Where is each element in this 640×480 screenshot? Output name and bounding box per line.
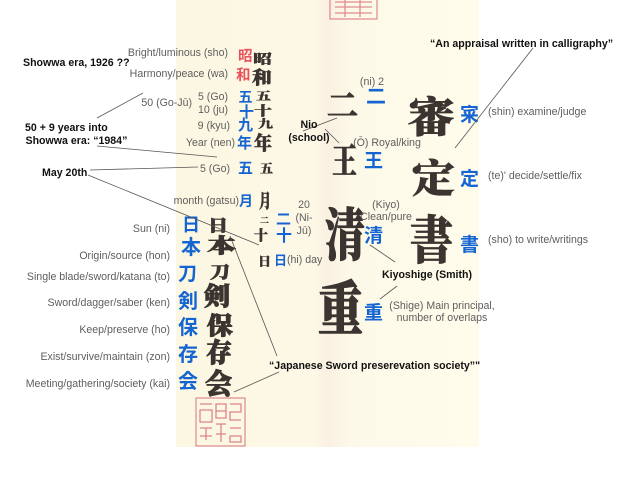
brush calligraphy: appraisal title: 書 bbox=[410, 199, 453, 274]
brush calligraphy: date column bbox=[252, 48, 274, 269]
date meaning labels: 9 (kyu) bbox=[198, 120, 230, 132]
appraisal meaning labels: (shin) examine/judge bbox=[488, 106, 586, 118]
date meaning labels bbox=[128, 47, 239, 207]
brush calligraphy: appraisal title bbox=[408, 84, 455, 274]
brush calligraphy: Nio Kiyoshige signature: 王 bbox=[332, 134, 357, 183]
brush calligraphy: Japanese Sword Preservation Society column bbox=[204, 213, 236, 402]
smith name meaning labels: (ni) 2 bbox=[360, 76, 384, 88]
blue kanji: date transcription bbox=[237, 87, 292, 269]
blue kanji: smith name and appraisal transcription: 清 bbox=[364, 221, 383, 248]
panel: scroll paper bbox=[176, 0, 479, 447]
appraisal meaning labels: (te)' decide/settle/fix bbox=[488, 170, 583, 182]
society meaning labels: Origin/source (hon) bbox=[79, 250, 170, 262]
blue kanji: date transcription: 十 bbox=[276, 222, 292, 246]
smith name meaning labels: (Kiyo) bbox=[372, 199, 400, 211]
heading: Japanese Sword preservation society: “Japanese Sword preserevation society”" bbox=[269, 360, 480, 372]
heading: Showwa era: Showwa era, 1926 ?? bbox=[23, 57, 130, 69]
date meaning labels: month (gatsu) bbox=[174, 195, 239, 207]
appraisal meaning labels: (sho) to write/writings bbox=[488, 234, 588, 246]
brush calligraphy: Japanese Sword Preservation Society column: 日 bbox=[208, 213, 228, 236]
brush calligraphy: Japanese Sword Preservation Society column: 存 bbox=[206, 330, 232, 370]
brush calligraphy: date column: 月 bbox=[259, 186, 271, 214]
red kanji: Showa era bbox=[236, 45, 252, 85]
heading: May 20th: May 20th bbox=[42, 167, 87, 179]
date meaning labels: 5 (Go) bbox=[198, 91, 228, 103]
blue kanji: smith name and appraisal transcription: 王 bbox=[364, 146, 383, 173]
connector lines bbox=[88, 48, 533, 392]
red seal: bottom bbox=[196, 398, 245, 446]
red seal: top bbox=[330, 0, 377, 19]
blue kanji: date transcription: 十 bbox=[239, 101, 254, 122]
red kanji: Showa era: 和 bbox=[236, 64, 250, 85]
brush calligraphy: date column: 五 bbox=[260, 159, 274, 176]
brush calligraphy: date column: 二 bbox=[260, 215, 270, 226]
day meaning labels: 20 bbox=[298, 199, 310, 211]
heading: appraisal: “An appraisal written in calligraphy” bbox=[430, 38, 613, 50]
brush calligraphy: date column: 日 bbox=[258, 252, 271, 269]
smith name meaning labels: Clean/pure bbox=[360, 211, 412, 223]
brush calligraphy: Nio Kiyoshige signature: 清 bbox=[325, 190, 365, 272]
blue kanji: society transcription: 剣 bbox=[178, 285, 198, 314]
blue kanji: society transcription: 本 bbox=[181, 231, 201, 260]
blue kanji: date transcription: 五 bbox=[238, 157, 253, 178]
blue kanji: society transcription: 会 bbox=[178, 365, 198, 394]
society meaning labels: Sword/dagger/saber (ken) bbox=[48, 297, 170, 309]
blue kanji: date transcription: 二 bbox=[276, 208, 291, 229]
blue kanji: smith name and appraisal transcription: 重 bbox=[364, 298, 383, 325]
brush calligraphy: Nio Kiyoshige signature: 二 bbox=[327, 81, 358, 126]
brush calligraphy: date column: 九 bbox=[258, 115, 273, 131]
brush calligraphy: date column: 十 bbox=[254, 101, 272, 120]
brush calligraphy: Japanese Sword Preservation Society column: 保 bbox=[207, 307, 233, 342]
blue kanji: date transcription: 五 bbox=[238, 87, 252, 107]
brush calligraphy: Japanese Sword Preservation Society column: 剣 bbox=[204, 278, 230, 313]
day meaning labels: Jū) bbox=[297, 225, 311, 237]
society meaning labels: Exist/survive/maintain (zon) bbox=[40, 351, 170, 363]
society meaning labels: Keep/preserve (ho) bbox=[79, 324, 170, 336]
smith name meaning labels: (Shige) Main principal, bbox=[389, 300, 495, 312]
blue kanji: date transcription: 年 bbox=[237, 132, 252, 153]
day meaning labels: (hi) day bbox=[287, 254, 323, 266]
blue kanji: smith name and appraisal transcription: 宷 bbox=[460, 100, 479, 127]
appraisal meaning labels bbox=[488, 106, 588, 246]
blue kanji: society transcription: 日 bbox=[182, 211, 200, 237]
blue kanji: society transcription bbox=[178, 211, 201, 394]
smith name meaning labels: number of overlaps bbox=[397, 312, 487, 324]
blue kanji: date transcription: 九 bbox=[238, 114, 253, 135]
brush calligraphy: date column: 和 bbox=[252, 64, 272, 89]
date meaning labels: 5 (Go) bbox=[200, 163, 230, 175]
brush calligraphy: date column: 昭 bbox=[253, 48, 272, 67]
blue kanji: society transcription: 存 bbox=[178, 338, 198, 367]
smith name meaning labels: (Ō) Royal/king bbox=[353, 137, 421, 149]
blue kanji: date transcription: 月 bbox=[239, 191, 253, 211]
date meaning labels: 50 (Go-Jū) bbox=[141, 97, 192, 109]
brush calligraphy: date column: 五 bbox=[256, 87, 271, 103]
heading: Kiyoshige Smith: Kiyoshige (Smith) bbox=[382, 269, 472, 281]
society meaning labels: Sun (ni) bbox=[133, 223, 170, 235]
brush calligraphy: date column: 十 bbox=[254, 225, 268, 245]
blue kanji: smith name and appraisal transcription: 書 bbox=[460, 230, 479, 257]
heading: 50 + 9 years into Showwa era: Showwa era: “1984” bbox=[26, 135, 127, 147]
red kanji: Showa era: 昭 bbox=[238, 45, 252, 66]
brush calligraphy: Nio Kiyoshige signature bbox=[318, 81, 365, 348]
brush calligraphy: Japanese Sword Preservation Society column: 本 bbox=[207, 230, 236, 259]
society meaning labels: Single blade/sword/katana (to) bbox=[27, 271, 170, 283]
heading: Nio school: Nio bbox=[300, 119, 318, 131]
day meaning labels bbox=[287, 199, 323, 266]
date meaning labels: 10 (ju) bbox=[198, 104, 228, 116]
smith name meaning labels bbox=[353, 76, 495, 324]
date meaning labels: Harmony/peace (wa) bbox=[130, 68, 228, 80]
blue kanji: date transcription: 日 bbox=[274, 250, 287, 269]
heading: 50 + 9 years into Showwa era: 50 + 9 years into bbox=[25, 122, 108, 134]
day meaning labels: (Ni- bbox=[295, 212, 313, 224]
blue kanji: society transcription: 保 bbox=[178, 311, 198, 340]
brush calligraphy: appraisal title: 定 bbox=[412, 148, 455, 204]
society meaning labels: Meeting/gathering/society (kai) bbox=[26, 378, 170, 390]
blue kanji: smith name and appraisal transcription: 定 bbox=[460, 164, 479, 191]
date meaning labels: Bright/luminous (sho) bbox=[128, 47, 228, 59]
blue kanji: smith name and appraisal transcription bbox=[364, 80, 479, 325]
blue kanji: smith name and appraisal transcription: 二 bbox=[366, 80, 386, 109]
brush calligraphy: Japanese Sword Preservation Society column: 刀 bbox=[210, 260, 230, 283]
brush calligraphy: date column: 年 bbox=[254, 129, 272, 156]
blue kanji: society transcription: 刀 bbox=[178, 259, 197, 286]
brush calligraphy: Japanese Sword Preservation Society column: 会 bbox=[205, 361, 232, 402]
brush calligraphy: Nio Kiyoshige signature: 重 bbox=[318, 264, 363, 348]
brush calligraphy: appraisal title: 審 bbox=[408, 84, 455, 144]
date meaning labels: Year (nen) bbox=[186, 137, 235, 149]
heading: Nio school: (school) bbox=[288, 132, 330, 144]
society meaning labels bbox=[26, 223, 170, 390]
